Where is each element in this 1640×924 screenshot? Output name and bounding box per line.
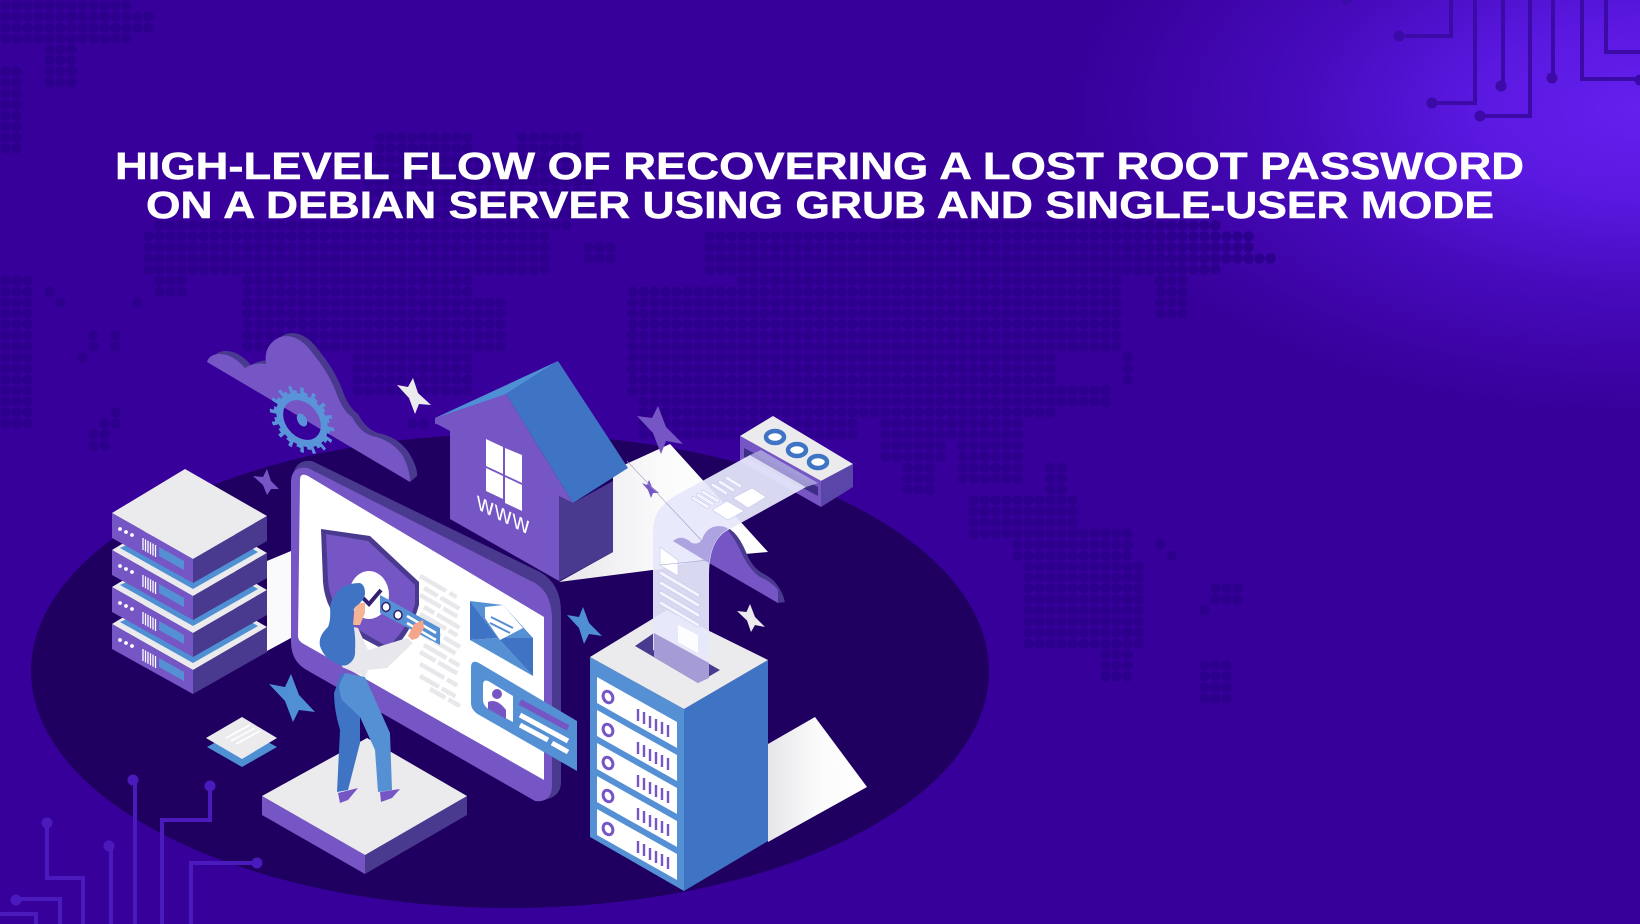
- world dot map: [0, 0, 1276, 704]
- profile card: [471, 662, 577, 771]
- www label: www: [476, 486, 531, 542]
- password bar: [380, 595, 440, 645]
- circuit traces: bottom left: [0, 774, 262, 924]
- lavender part inside tower slot: [654, 633, 709, 683]
- icon: blue star beside monitor: [567, 607, 602, 644]
- icon: blue star bottom left: [269, 674, 315, 722]
- icon: white star right: [737, 604, 765, 632]
- title: ON A DEBIAN SERVER USING GRUB AND SINGLE-USER MODE: [146, 185, 1494, 227]
- hair: [320, 583, 365, 666]
- icon: white star top: [397, 378, 431, 414]
- white floor shadow behind tower: [768, 717, 867, 842]
- dark ellipse platform: [31, 434, 989, 908]
- icon: window: [486, 439, 522, 511]
- white floor shadow behind house: [559, 444, 768, 582]
- icon: purple star above shadow: [637, 406, 683, 454]
- shirt and arm: [342, 627, 413, 677]
- illustration: isometric server recovery scene: [112, 333, 867, 891]
- hand: [408, 620, 424, 640]
- icon: woman figure: [320, 583, 440, 803]
- icon: floating papers: [206, 717, 277, 767]
- paper contents: [660, 488, 766, 576]
- face: [353, 603, 365, 625]
- icon: platform under woman: [262, 738, 467, 874]
- circuit traces: top right: [1342, 0, 1640, 122]
- white floor shadow behind server stack: [267, 551, 291, 651]
- icon: house with www: [435, 361, 628, 581]
- paper strip flowing from device to tower: [627, 450, 818, 683]
- icon: envelope: [470, 601, 533, 676]
- icon: lower cloud behind paper strip: [673, 526, 785, 603]
- tower slots: [597, 677, 677, 880]
- icon: small purple star: [642, 480, 659, 498]
- icon: monitor: [291, 461, 577, 801]
- shield: [321, 529, 419, 653]
- title: [115, 146, 1524, 227]
- icon: purple star near stack: [253, 469, 279, 495]
- screen text lines: [420, 576, 460, 706]
- title: HIGH-LEVEL FLOW OF RECOVERING A LOST ROOT PASSWORD: [115, 146, 1524, 188]
- icon: server stack: [112, 469, 267, 694]
- icon: server tower: [590, 610, 768, 891]
- icon: cloud with gear: [207, 333, 417, 482]
- shoes: [338, 788, 358, 803]
- back leg: [334, 672, 360, 792]
- cloud seen through strip: [673, 526, 728, 563]
- icon: device with rings: [740, 416, 853, 507]
- front leg: [339, 673, 392, 792]
- icon: gear: [260, 377, 344, 463]
